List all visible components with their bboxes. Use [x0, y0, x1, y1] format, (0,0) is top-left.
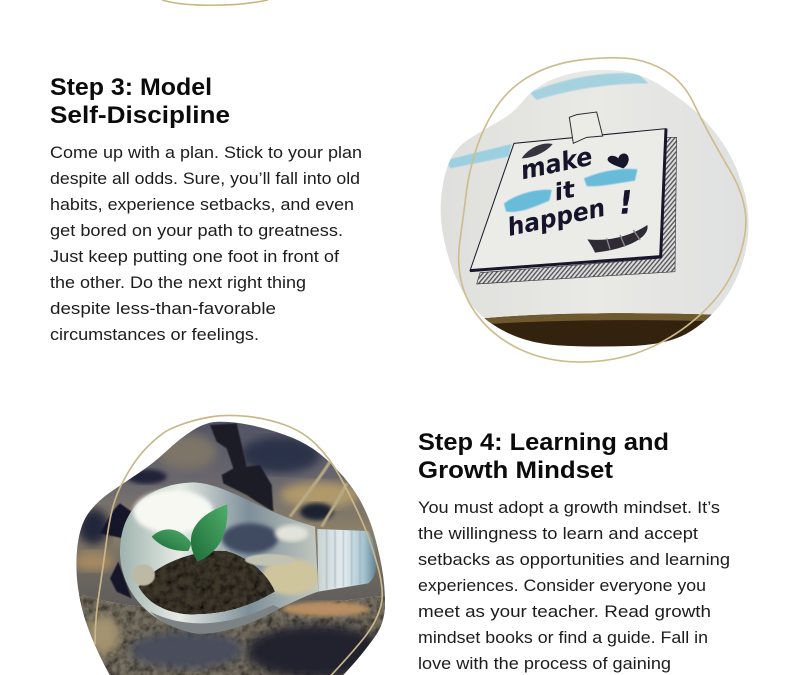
text block: step 4 body: meet as your teacher. Read growth	[418, 602, 711, 621]
blue marker band left	[447, 144, 512, 168]
gold ring	[95, 415, 382, 675]
heading: step 4	[418, 429, 669, 484]
soil	[138, 551, 275, 614]
brown table edge	[484, 313, 712, 346]
text block: step 3 body: Just keep putting one foot in front of	[50, 247, 339, 266]
tape	[569, 112, 603, 143]
text block: step 3 body	[50, 143, 362, 344]
blurred background tones	[280, 482, 360, 508]
text block: step 4 body	[418, 498, 730, 673]
ground	[73, 592, 390, 675]
leaves	[152, 529, 192, 551]
text block: step 4 body: mindset books or find a guide. Fall in	[418, 628, 708, 647]
text block: step 3 body: the other. Do the next right thing	[50, 273, 306, 292]
heading: step 4: Growth Mindset	[418, 457, 613, 484]
text block: step 4 body: You must adopt a growth mindset. It’s	[418, 498, 720, 517]
marker strokes	[584, 169, 637, 186]
image: seedling in light bulb	[76, 414, 385, 675]
note sheet	[470, 129, 666, 271]
heading: step 4: Step 4: Learning and	[418, 429, 669, 456]
text block: step 3 body: despite less-than-favorable	[50, 299, 276, 318]
text block: step 4 body: the willingness to learn and accept	[418, 524, 698, 543]
heading: step 3: Step 3: Model	[50, 74, 212, 101]
text block: step 3 body: habits, experience setbacks, and even	[50, 195, 354, 214]
gold ring	[459, 58, 746, 362]
handwriting: make	[518, 141, 595, 185]
image: make it happen note	[440, 57, 748, 363]
text block: step 3 body: circumstances or feelings.	[50, 325, 259, 344]
branch	[210, 423, 273, 512]
leaf doodles	[522, 144, 648, 253]
text block: step 4 body: love with the process of gaining	[418, 654, 671, 673]
decorative outline: previous section ring	[162, 0, 268, 5]
text block: step 3 body: get bored on your path to greatness.	[50, 221, 343, 240]
blue marker band top	[530, 73, 648, 100]
image: make it happen note: happen	[505, 193, 608, 242]
bulb glass	[120, 482, 318, 632]
text block: step 4 body: setbacks as opportunities and learning	[418, 550, 730, 569]
image: make it happen note: it	[551, 175, 578, 207]
text block: step 4 body: experiences. Consider everyone you	[418, 576, 706, 595]
note shadow hatch	[477, 137, 677, 284]
image: make it happen note: !	[617, 183, 634, 222]
bulb glass bottom	[150, 605, 280, 634]
heart	[608, 154, 629, 168]
text block: step 3 body: despite all odds. Sure, you’ll fall into old	[50, 169, 360, 188]
text block: step 3 body: Come up with a plan. Stick to your plan	[50, 143, 362, 162]
heading: step 3: Self-Discipline	[50, 102, 230, 129]
heading: step 3	[50, 74, 230, 129]
bulb base	[317, 529, 376, 592]
